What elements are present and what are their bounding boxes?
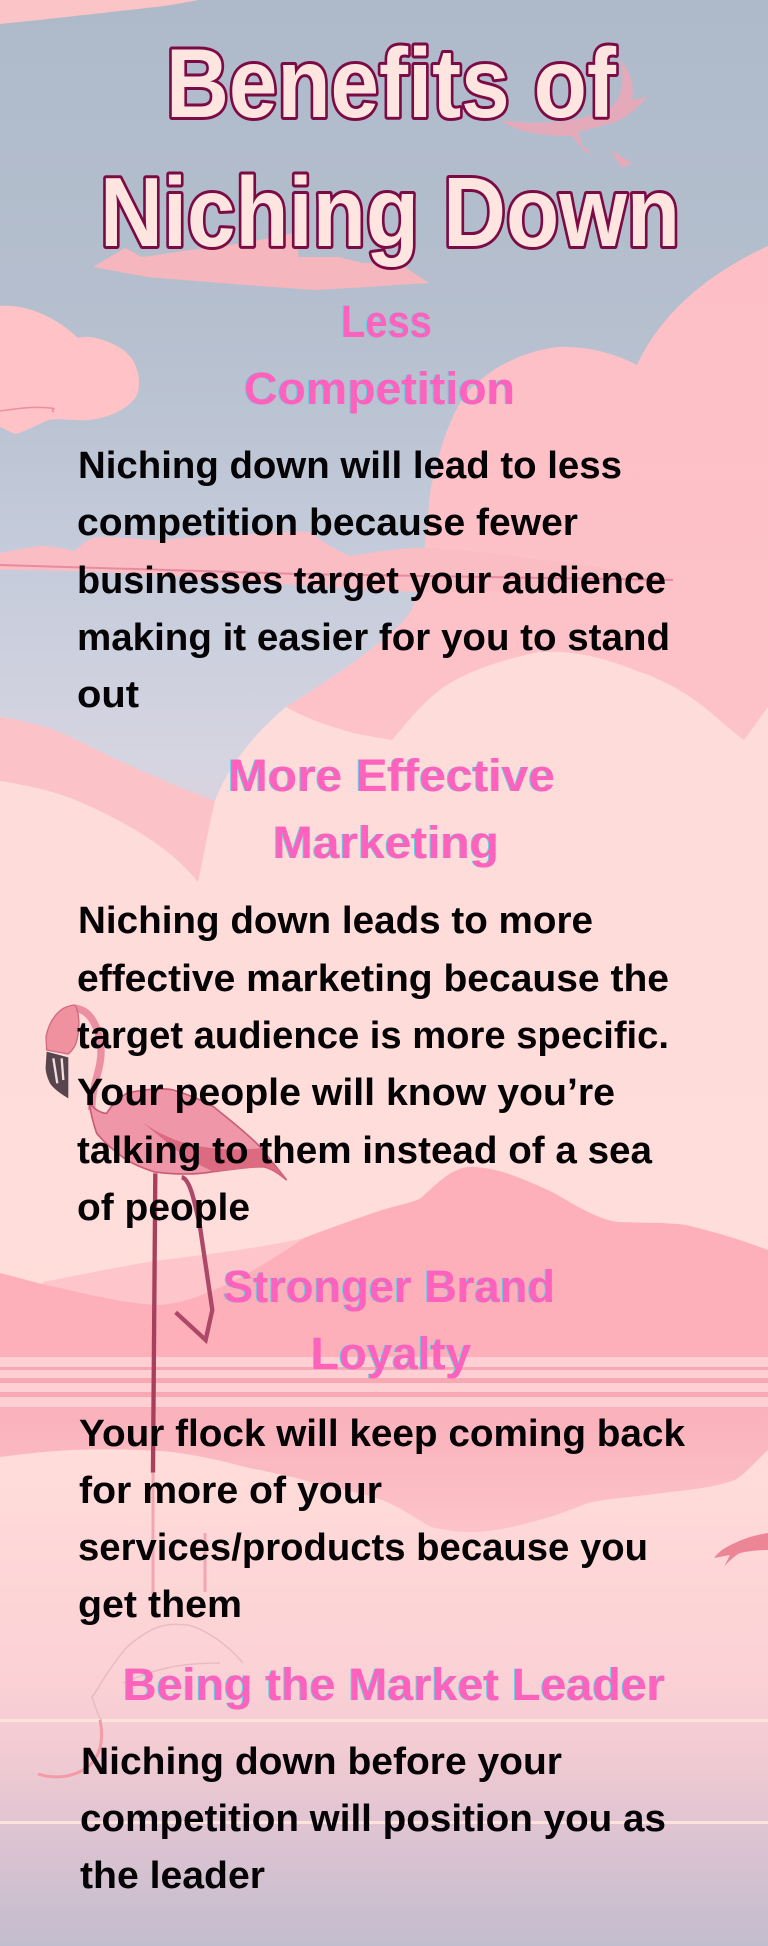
- flying flamingo silhouette: [500, 60, 647, 168]
- body text: Niching down will lead to less: [78, 445, 622, 487]
- body text: Niching down leads to more: [78, 900, 593, 942]
- heading: [244, 296, 515, 414]
- section: Stronger Brand Loyalty: [78, 1261, 686, 1626]
- mountain: [0, 1167, 768, 1360]
- title: [100, 28, 680, 267]
- water stripes: [0, 1357, 768, 1407]
- flamingo body: [89, 1089, 287, 1180]
- flamingo: [46, 1005, 287, 1473]
- heading: More Effective: [228, 750, 555, 801]
- section: More Effective Marketing: [77, 750, 669, 1229]
- reflection: [0, 1400, 768, 1532]
- light hills: [0, 652, 768, 920]
- back hill: [43, 1238, 330, 1340]
- body text: of people: [77, 1187, 250, 1229]
- left pink band: [0, 717, 230, 920]
- body text: [80, 1741, 666, 1897]
- body text: [77, 445, 670, 716]
- flamingo reflection: [38, 1473, 243, 1777]
- heading: [223, 1261, 555, 1379]
- heading: [228, 750, 555, 868]
- horizon lines: [0, 1719, 768, 1722]
- body text: businesses target your audience: [77, 560, 666, 602]
- body text: [78, 1413, 686, 1626]
- section: Less Competition: [77, 296, 670, 716]
- body text: making it easier for you to stand: [77, 617, 670, 659]
- body text: competition because fewer: [77, 502, 578, 544]
- heading: Stronger Brand: [223, 1261, 555, 1312]
- body text: talking to them instead of a sea: [77, 1130, 653, 1172]
- body text: effective marketing because the: [77, 958, 669, 1000]
- body text: competition will position you as: [80, 1798, 666, 1840]
- cloud: left: [0, 306, 139, 434]
- cloud: wisp with line: [0, 531, 680, 592]
- body text: target audience is more specific.: [77, 1015, 669, 1057]
- body text: services/products because you: [78, 1527, 648, 1569]
- lower background: [0, 915, 768, 1946]
- body text: Niching down before your: [81, 1741, 562, 1783]
- flamingo legs: [153, 1173, 155, 1473]
- cloud: top left: [0, 0, 198, 24]
- body text: get them: [78, 1584, 242, 1626]
- flamingo fragment right: [714, 1533, 768, 1567]
- cloud: large right: [240, 246, 768, 900]
- flamingo neck: [75, 1008, 101, 1110]
- title: Benefits of: [166, 28, 616, 138]
- heading: Marketing: [273, 817, 499, 868]
- heading: Less: [341, 296, 432, 347]
- body text: the leader: [80, 1855, 265, 1897]
- body text: for more of your: [79, 1470, 382, 1512]
- body text: Your people will know you’re: [77, 1072, 615, 1114]
- cloud: under title: [93, 233, 429, 290]
- heading: Being the Market Leader: [123, 1659, 665, 1710]
- body text: out: [77, 674, 139, 716]
- body text: Your flock will keep coming back: [79, 1413, 686, 1455]
- title: Niching Down: [100, 157, 680, 267]
- body text: [77, 900, 669, 1229]
- flamingo head: [46, 1005, 79, 1054]
- heading: Competition: [244, 363, 515, 414]
- flamingo beak: [46, 1052, 68, 1098]
- section: Being the Market Leader: [80, 1659, 666, 1897]
- heading: Loyalty: [311, 1328, 471, 1379]
